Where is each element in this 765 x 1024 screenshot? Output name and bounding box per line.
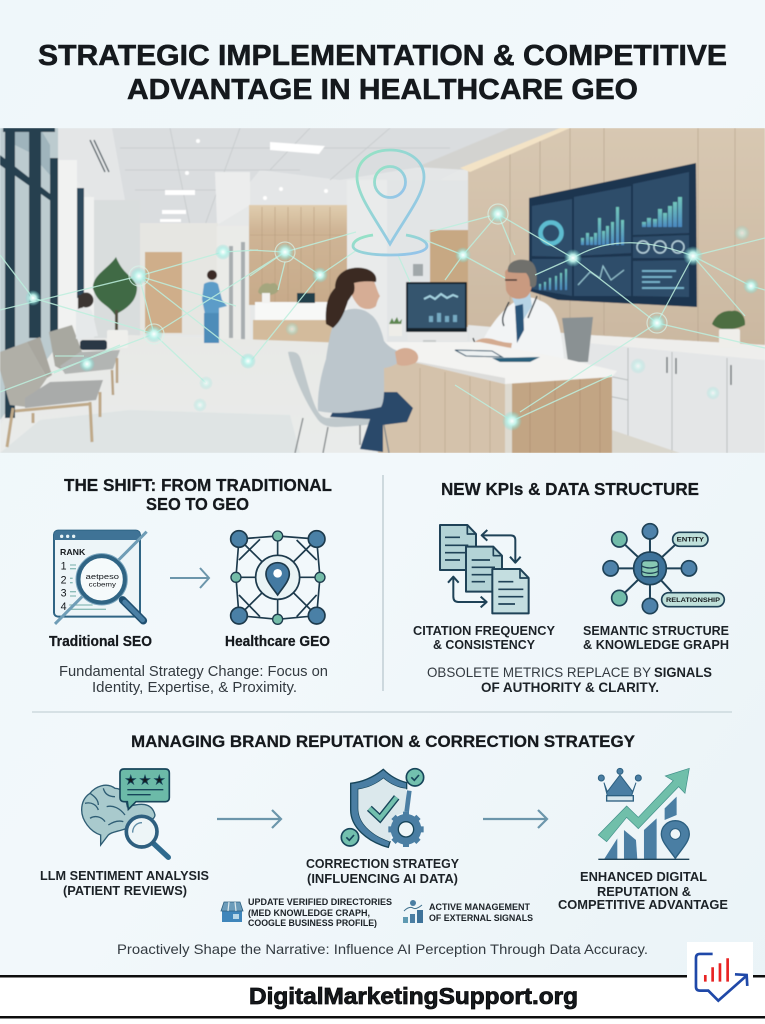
label: enhanced digital reputation: ENHANCED DIGITAL [580,869,707,884]
text: fundamental strategy change: Fundamental Strategy Change: Focus on [59,663,328,680]
label: semantic structure and knowledge graph: SEMANTIC STRUCTURE [583,623,729,638]
waiting chair front [0,337,103,447]
icon: traditional SEO browser with magnifier: 1 [61,560,67,572]
map pin hologram [353,150,427,255]
label: citation frequency and consistency: CITATION FREQUENCY [413,623,555,638]
label: correction strategy [306,856,459,886]
label: semantic structure and knowledge graph [583,623,729,652]
label: LLM sentiment analysis: LLM SENTIMENT ANALYSIS [40,868,209,883]
title: STRATEGIC IMPLEMENTATION & COMPETITIVE [38,40,727,72]
wall screen dashboard [529,163,697,307]
label: healthcare GEO: Healthcare GEO [225,633,330,650]
corridor plant [93,257,137,315]
text: active management of external signals: ACTIVE MANAGEMENT [429,902,530,913]
label: correction strategy: (INFLUENCING AI DATA) [307,871,458,886]
arrow: SEO to GEO [170,568,209,588]
desktop monitor [406,282,467,332]
icon: traditional SEO browser with magnifier: aetpeso [86,574,119,581]
footer website: DigitalMarketingSupport.org [249,983,578,1009]
label: semantic structure and knowledge graph: & KNOWLEDGE GRAPH [583,637,729,652]
icon: shield with check and gear [341,769,424,847]
label: LLM sentiment analysis [40,868,209,898]
icon: traditional SEO browser with magnifier [54,531,147,624]
heading: the shift: THE SHIFT: FROM TRADITIONAL [64,475,332,495]
icon: crown, growth chart and pin [598,768,689,859]
icon: external signals chart [403,900,423,923]
photo: clinic reception with digital network overlay [0,128,765,453]
text: obsolete metrics: OF AUTHORITY & CLARITY. [481,679,659,695]
icon: traditional SEO browser with magnifier: 4 [61,601,67,613]
label: citation frequency and consistency: & CONSISTENCY [433,637,535,652]
network lines [0,214,765,421]
cabinets [588,343,765,453]
corridor wall and door [187,223,216,225]
title: ADVANTAGE IN HEALTHCARE GEO [127,74,638,106]
label: citation frequency and consistency [413,623,555,652]
floor [128,335,329,372]
waiting chair rear [49,325,120,395]
label: enhanced digital reputation: COMPETITIVE ADVANTAGE [558,897,728,912]
desk plant [389,317,402,325]
text: fundamental strategy change: Identity, Expertise, & Proximity. [92,679,297,696]
label: enhanced digital reputation [558,869,728,912]
label: enhanced digital reputation: REPUTATION & [597,884,691,899]
icon: healthcare GEO network [231,531,325,624]
text: obsolete metrics: OBSOLETE METRICS REPLACE BY [427,664,652,680]
wood wall [468,128,765,345]
label: traditional SEO: Traditional SEO [49,633,152,650]
seated person [78,292,94,308]
label: LLM sentiment analysis: (PATIENT REVIEWS) [63,883,187,898]
text: obsolete metrics [427,664,712,695]
icon: traditional SEO browser with magnifier: ccbemy [89,581,117,588]
arrow: analysis to correction [217,810,281,828]
text: update verified directories [248,897,393,929]
wood column and reception desk [249,205,347,305]
heading: the shift [64,475,332,514]
text: obsolete metrics: SIGNALS [654,664,712,680]
icon: brain with review bubble and magnifier [82,769,169,857]
icon: traditional SEO browser with magnifier: 2 [61,574,67,586]
heading: managing brand reputation: MANAGING BRAND REPUTATION & CORRECTION STRATEGY [131,732,636,751]
icon: verified directory storefront [221,902,243,922]
patient chair [288,352,370,428]
icon: traditional SEO browser with magnifier: RANK [60,547,86,557]
icon: brain with review bubble and magnifier: ★★★ [125,773,165,787]
text: proactively shape the narrative: Proactively Shape the Narrative: Influence AI Perception Through Data Accuracy. [117,941,648,957]
text: active management of external signals: OF EXTERNAL SIGNALS [429,913,534,924]
text: active management of external signals [429,902,534,924]
patient [330,392,413,452]
panel: new KPIs and data structure [413,479,729,695]
doctor chair [562,317,593,362]
logo [687,942,753,1004]
text: update verified directories: COOGLE BUSINESS PROFILE) [248,918,377,929]
panel: managing brand reputation [40,732,728,957]
icon: citation documents with arrows [440,525,529,613]
text: fundamental strategy change [59,663,328,696]
nurse [207,270,217,280]
heading: new KPIs: NEW KPIs & DATA STRUCTURE [441,479,699,499]
network nodes [25,204,759,431]
text: update verified directories: UPDATE VERIFIED DIRECTORIES [248,897,393,908]
footer band [0,975,765,1024]
title [38,40,727,106]
left windows [0,128,58,420]
ceiling [37,128,560,225]
centre white wall and door [347,180,470,345]
icon: knowledge graph [603,524,724,614]
icon: traditional SEO browser with magnifier: 3 [61,588,67,600]
icon: knowledge graph: ENTITY [677,537,705,544]
desk [378,362,506,453]
heading: the shift: SEO TO GEO [146,494,249,514]
doctor [483,298,564,361]
cabinet plant [712,311,745,329]
label: correction strategy: CORRECTION STRATEGY [306,856,459,871]
arrow: correction to advantage [483,810,547,828]
text: update verified directories: (MED KNOWLEDGE CRAPH, [248,908,370,919]
panel: the shift from traditional SEO to GEO [49,475,332,696]
icon: knowledge graph: RELATIONSHIP [666,597,721,604]
